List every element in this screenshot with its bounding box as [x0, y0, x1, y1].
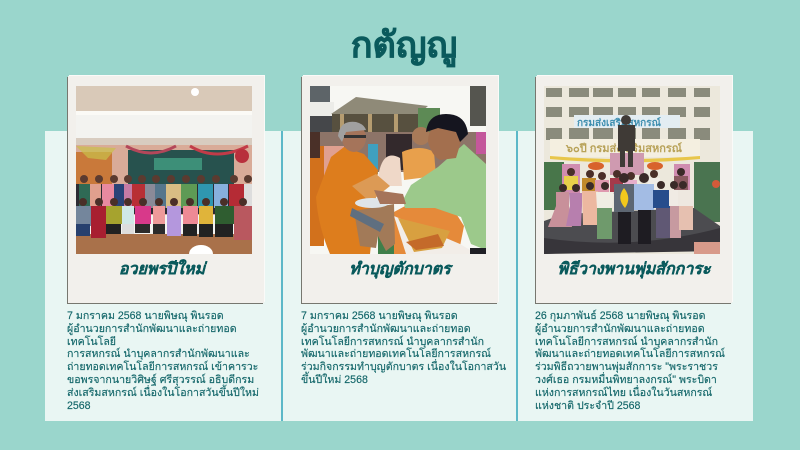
- caption: ทำบุญตักบาตร: [349, 261, 451, 278]
- caption: อวยพรปีใหม่: [119, 261, 205, 278]
- text block: wreath-laying: แห่งชาติ ประจำปี 2568: [535, 400, 640, 412]
- text block: alms-giving: พัฒนาและถ่ายทอดเทคโนโลยีการสหกรณ์: [301, 348, 491, 360]
- back row: [564, 168, 688, 196]
- goods on table: [394, 198, 464, 254]
- panel: alms-giving card: [302, 76, 498, 303]
- photo: monk receiving alms: [310, 86, 486, 254]
- photo: group at statue: กรมส่งเสริมสหกรณ์: [577, 117, 662, 129]
- text block: wreath-laying: ผู้อำนวยการสำนักพัฒนาและถ่ายทอด: [535, 323, 705, 335]
- text block: New Year blessing: เทคโนโลยี: [67, 336, 116, 348]
- text block: New Year blessing: การสหกรณ์ นำบุคลากรสำนักพัฒนาและ: [67, 348, 250, 360]
- photo: group at statue: ๖๐ปี กรมส่งเสริมสหกรณ์: [565, 142, 683, 155]
- text block: New Year blessing: ส่งเสริมสหกรณ์ เนื่องในโอกาสวันขึ้นปีใหม่: [67, 387, 259, 399]
- photo: group in hall: [76, 86, 252, 254]
- text block: wreath-laying: วงศ์เธอ กรมหมื่นพิทยาลงกรณ์" พระบิดา: [535, 374, 717, 386]
- text block: New Year blessing: ถ่ายทอดเทคโนโลยีการสหกรณ์ เข้าคารวะ: [67, 361, 258, 373]
- text block: New Year blessing: [67, 310, 259, 412]
- photo: group at statue: [544, 86, 720, 254]
- text block: alms-giving: เทคโนโลยีการสหกรณ์ นำบุคลากรสำนัก: [301, 336, 484, 348]
- text block: alms-giving: ร่วมกิจกรรมทำบุญตักบาตร เนื่องในโอกาสวัน: [301, 361, 506, 373]
- text block: wreath-laying: [535, 310, 725, 412]
- text block: wreath-laying: ร่วมพิธีถวายพานพุ่มสักการะ "พระราชวร: [535, 361, 718, 373]
- man in green: [403, 144, 486, 250]
- text block: alms-giving: 7 มกราคม 2568 นายพิษณุ พินรอด: [301, 310, 458, 322]
- text block: New Year blessing: ผู้อำนวยการสำนักพัฒนาและถ่ายทอด: [67, 323, 237, 335]
- text block: New Year blessing: 7 มกราคม 2568 นายพิษณุ พินรอด: [67, 310, 224, 322]
- text block: wreath-laying: 26 กุมภาพันธ์ 2568 นายพิษณุ พินรอด: [535, 310, 706, 322]
- text block: alms-giving: ผู้อำนวยการสำนักพัฒนาและถ่ายทอด: [301, 323, 471, 335]
- alms bowl and bag: [352, 174, 390, 202]
- text block: wreath-laying: พัฒนาและถ่ายทอดเทคโนโลยีการสหกรณ์: [535, 348, 725, 360]
- text block: alms-giving: ขึ้นปีใหม่ 2568: [301, 374, 368, 386]
- panel: wreath-laying card: [536, 76, 732, 303]
- panel: New Year blessing card: [68, 76, 264, 303]
- title: กตัญญู: [351, 24, 457, 65]
- text block: wreath-laying: แห่งการสหกรณ์ไทย เนื่องในวันสหกรณ์: [535, 387, 712, 399]
- caption: พิธีวางพานพุ่มสักการะ: [558, 261, 710, 278]
- text block: alms-giving: [301, 310, 506, 386]
- lower pale panel: [45, 131, 753, 421]
- front row: [548, 173, 693, 244]
- monk: [316, 147, 378, 254]
- text block: New Year blessing: ขอพรจากนายวิศิษฐ์ ศรีสุวรรณ์ อธิบดีกรม: [67, 374, 254, 386]
- text block: wreath-laying: เทคโนโลยีการสหกรณ์ นำบุคลากรสำนัก: [535, 336, 718, 348]
- text block: New Year blessing: 2568: [67, 400, 91, 412]
- steps: [544, 208, 720, 254]
- statue: [618, 115, 635, 167]
